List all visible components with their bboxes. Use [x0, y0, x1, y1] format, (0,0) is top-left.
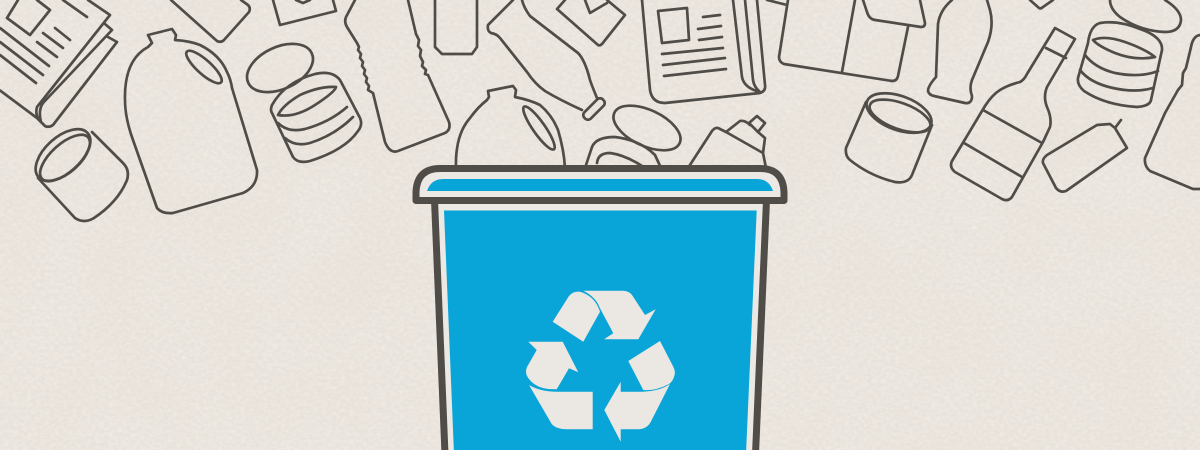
bin body [434, 200, 766, 450]
icon: rounded carton centre [435, 0, 477, 54]
icon: jug left [125, 29, 257, 213]
icon: wine bottle [951, 28, 1075, 200]
bin lid [416, 168, 784, 200]
icon: envelope [557, 0, 625, 45]
icon: newspaper left [0, 0, 117, 127]
icon: recycling symbol [526, 291, 675, 442]
falling recyclables line art [0, 0, 1200, 221]
icon: small flattened bottle [1043, 120, 1127, 192]
icon: glass bottle top [928, 0, 992, 103]
icon: can left [26, 120, 128, 221]
icon: rectangle carton top [171, 0, 250, 42]
icon: spray can in bin [688, 116, 766, 168]
recycling bin [416, 168, 784, 450]
icon: ribbed plastic bottle [345, 0, 450, 152]
icon: can centre right [846, 85, 937, 182]
icon: lid and can [239, 34, 361, 162]
icon: book centre [642, 0, 765, 103]
icon: jug in bin [456, 86, 565, 168]
icon: lid top right [1110, 0, 1181, 32]
icon: bottle far right [1145, 35, 1200, 189]
icon: cardboard box top [767, 0, 925, 81]
icon: soda bottle [488, 0, 606, 121]
icon: lid and can in bin [585, 96, 687, 168]
icon: small corner box [1030, 0, 1053, 8]
icon: can top right [1078, 22, 1162, 107]
icon: small box top [273, 0, 336, 25]
